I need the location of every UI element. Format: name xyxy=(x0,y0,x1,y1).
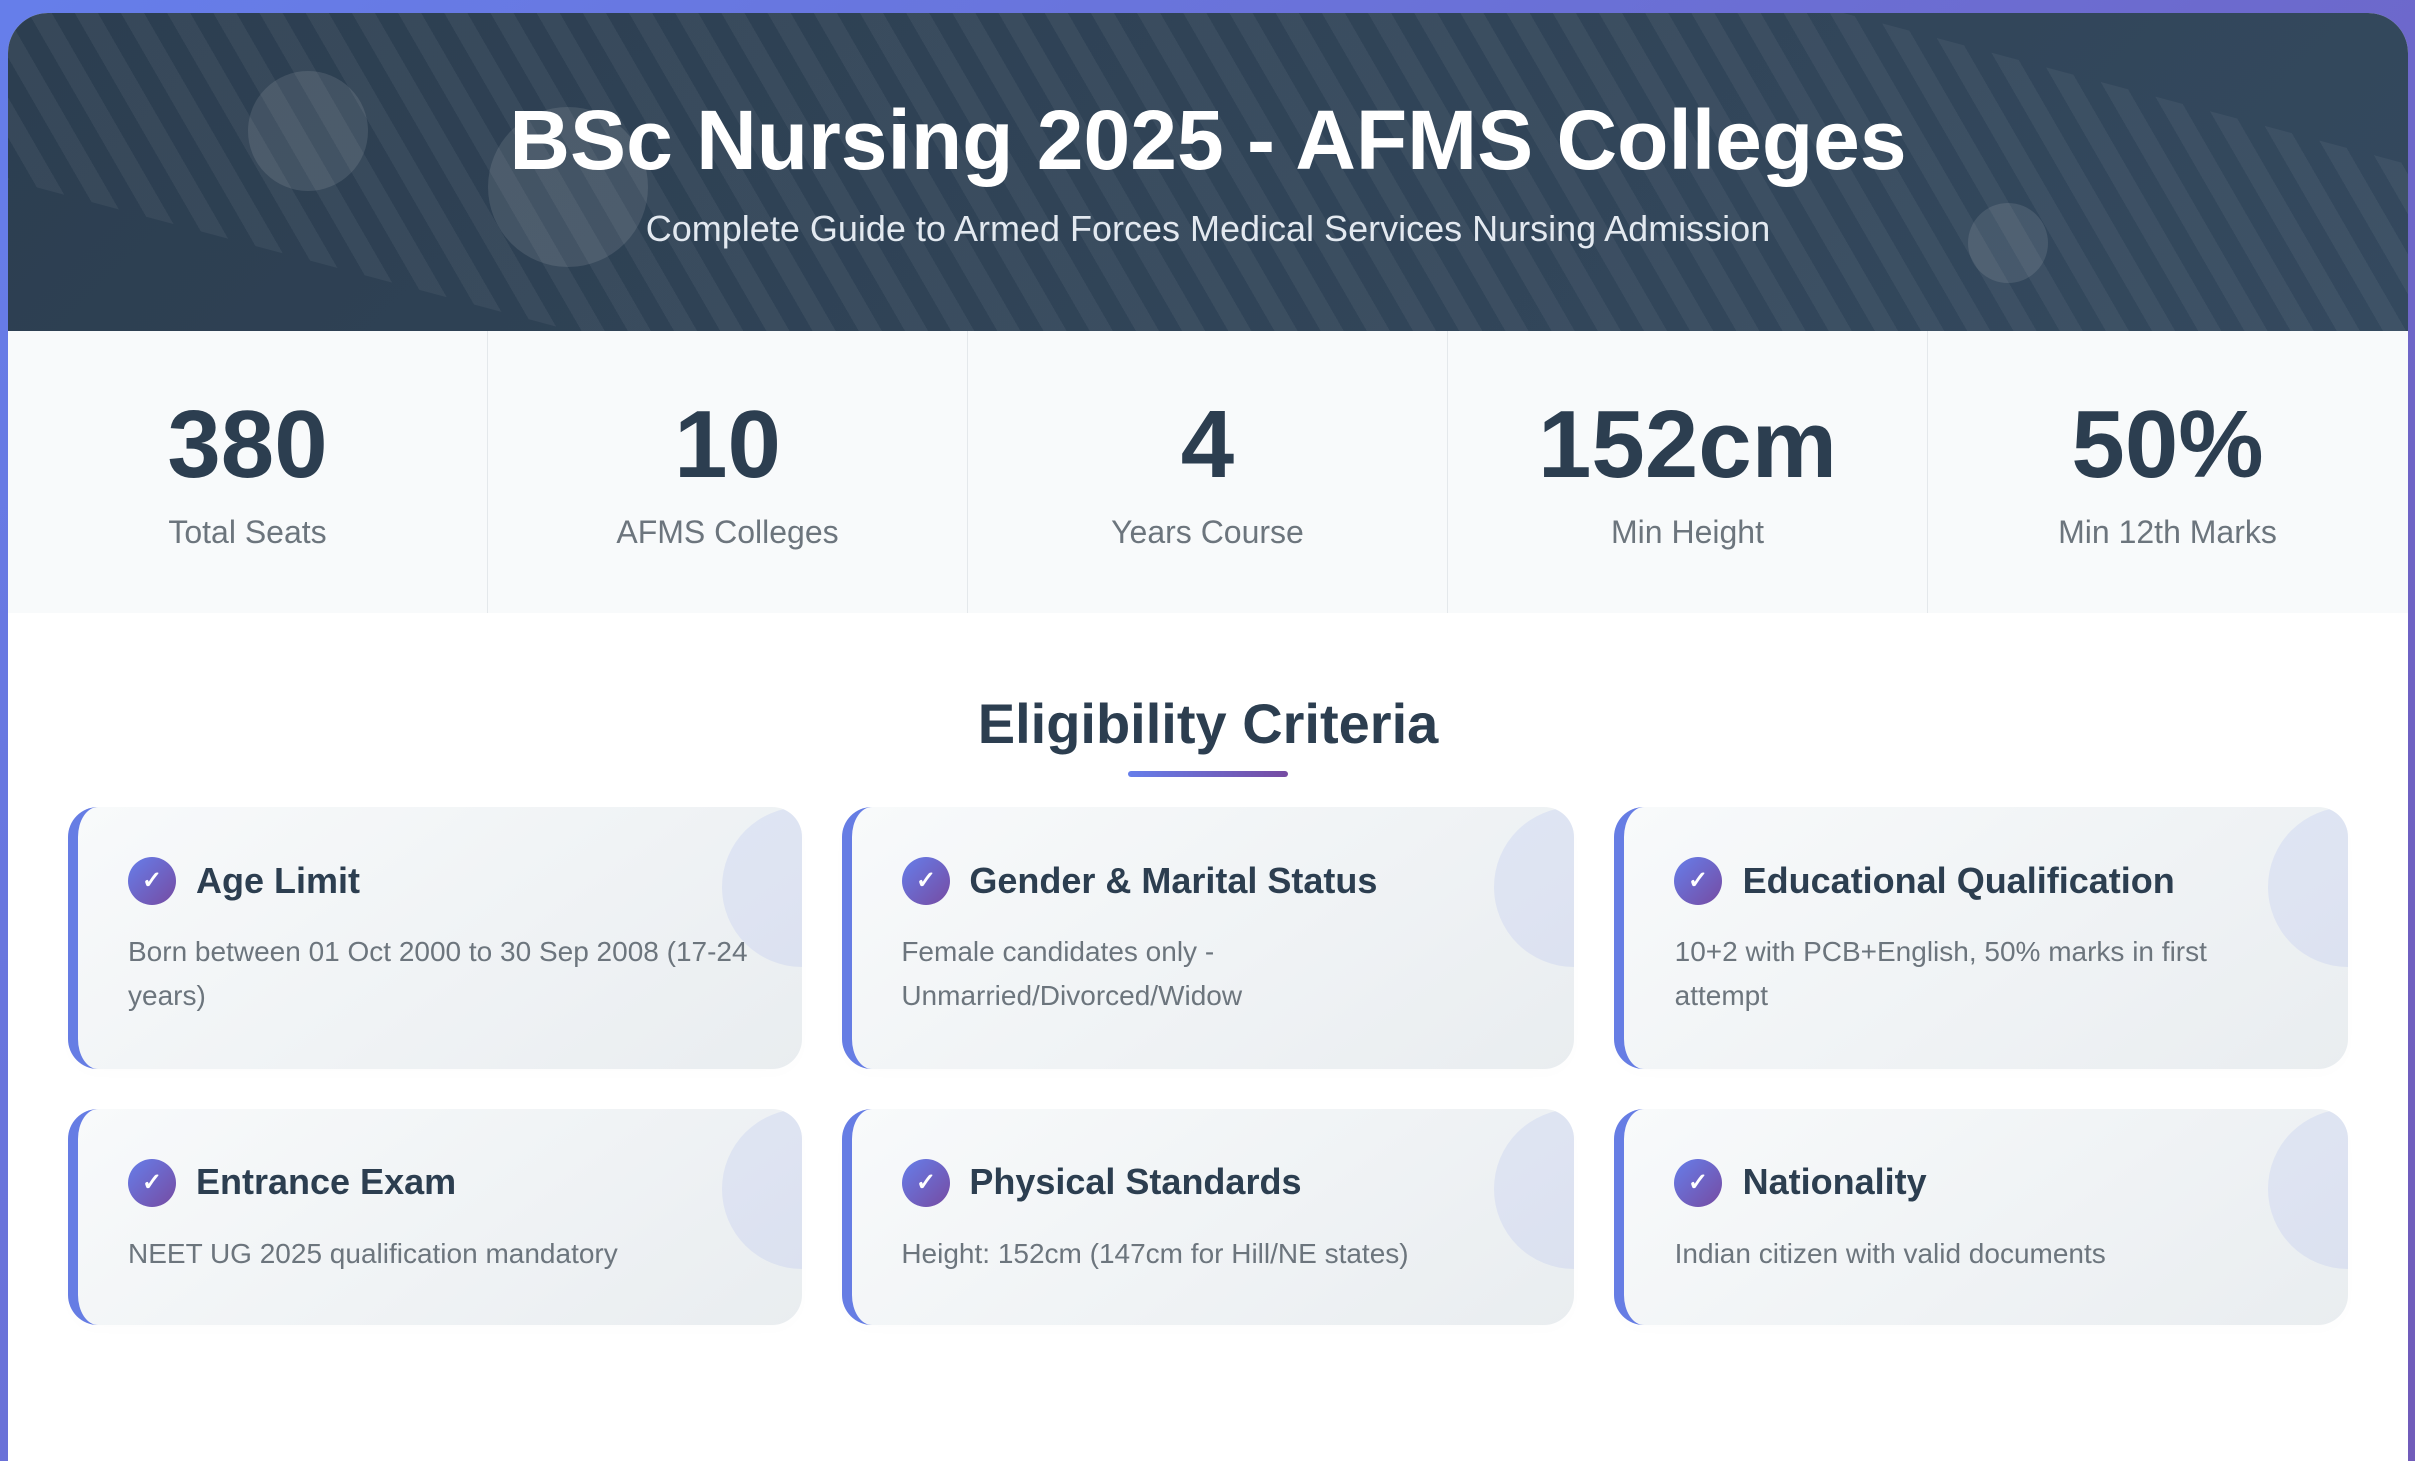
card: age limit xyxy=(68,807,802,1069)
heading: eligibility criteria: Eligibility Criteria xyxy=(978,692,1438,755)
card heading with check icon: Entrance Exam xyxy=(196,1161,456,1202)
card heading with check icon: Gender & Marital Status xyxy=(969,860,1377,901)
stat: min 12th marks: 50% xyxy=(2071,391,2264,498)
card text: Height: 152cm (147cm for Hill/NE states) xyxy=(901,1238,1409,1269)
stat: min height: Min Height xyxy=(1611,514,1764,550)
stat: years course: Years Course xyxy=(1111,514,1304,550)
card heading with check icon: ✓ xyxy=(1688,867,1708,894)
stat: min 12th marks: Min 12th Marks xyxy=(2058,514,2277,550)
stat: AFMS colleges: 10 xyxy=(674,391,781,498)
subtitle: Complete Guide to Armed Forces Medical Services Nursing Admission xyxy=(646,208,1770,249)
panel: key stats xyxy=(8,331,2408,613)
card heading with check icon xyxy=(1674,1159,1927,1207)
card heading with check icon: Age Limit xyxy=(196,860,360,901)
card text: Indian citizen with valid documents xyxy=(1675,1238,2106,1269)
card heading with check icon: ✓ xyxy=(1688,1169,1708,1196)
stat: min height: 152cm xyxy=(1538,391,1837,498)
stat: total seats xyxy=(8,331,488,613)
stat: total seats: Total Seats xyxy=(168,514,327,550)
decorative circle right xyxy=(1968,203,2048,283)
card: entrance exam xyxy=(68,1109,802,1325)
stat: AFMS colleges: AFMS Colleges xyxy=(616,514,839,550)
card heading with check icon: ✓ xyxy=(916,867,936,894)
stat: years course: 4 xyxy=(1181,391,1234,498)
title: BSc Nursing 2025 - AFMS Colleges xyxy=(509,93,1907,187)
card: physical standards xyxy=(842,1109,1574,1325)
panel: header banner xyxy=(8,13,2408,331)
card: educational qualification xyxy=(1614,807,2348,1069)
card text: Born between 01 Oct 2000 to 30 Sep 2008 (17-24 years) xyxy=(128,936,748,1011)
heading underline xyxy=(1128,771,1288,777)
card heading with check icon: Nationality xyxy=(1743,1161,1927,1202)
stat: min 12th marks xyxy=(1928,331,2408,613)
card heading with check icon: ✓ xyxy=(916,1169,936,1196)
card heading with check icon xyxy=(128,857,360,905)
card heading with check icon xyxy=(128,1159,456,1207)
stat: AFMS colleges xyxy=(488,331,968,613)
decorative circle left xyxy=(248,71,368,191)
card: nationality xyxy=(1614,1109,2348,1325)
card: gender and marital status xyxy=(842,807,1574,1069)
card heading with check icon: Educational Qualification xyxy=(1743,860,2175,901)
card heading with check icon: ✓ xyxy=(142,867,162,894)
stat: total seats: 380 xyxy=(167,391,328,498)
card text: NEET UG 2025 qualification mandatory xyxy=(128,1238,618,1269)
stat: min height xyxy=(1448,331,1928,613)
card text: Female candidates only - Unmarried/Divorced/Widow xyxy=(901,936,1242,1011)
card heading with check icon: Physical Standards xyxy=(969,1161,1301,1202)
card heading with check icon: ✓ xyxy=(142,1169,162,1196)
decorative circle middle xyxy=(488,107,648,267)
card text: 10+2 with PCB+English, 50% marks in first attempt xyxy=(1675,936,2207,1011)
stat: years course xyxy=(968,331,1448,613)
